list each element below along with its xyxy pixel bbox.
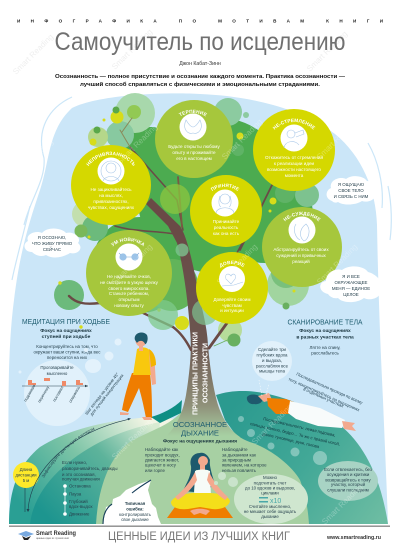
distance marker: Длина — [20, 467, 33, 472]
cloud: right bottom: Я И ВСЕ — [342, 274, 360, 279]
text on teal hill: пальцы, колено, бедро… То же с правой ногой, — [250, 421, 341, 447]
list: steps: вдох-выдох — [69, 504, 93, 509]
text: breathing left: проходит воздух, — [145, 452, 180, 458]
section: walking meditation — [22, 317, 110, 360]
cloud: right top: СВОЕ ТЕЛО — [338, 188, 364, 193]
cloud: left: Я ОСОЗНАЮ, — [38, 235, 66, 240]
text: Smart Reading — [11, 137, 55, 181]
scan caption arc: Последовательно проходя по всему — [296, 371, 364, 406]
text: Smart Reading — [315, 242, 359, 286]
cloud: right bottom: ОКРУЖАЮЩЕЕ — [334, 280, 368, 285]
inner teal band — [30, 422, 160, 524]
section: body scan: расслабьтесь — [311, 350, 340, 356]
panel: beginner mind: новому опыту — [114, 303, 145, 308]
breath circle: мышцы тела — [259, 368, 285, 374]
list: steps: Движение — [69, 512, 90, 516]
cloud: left — [25, 228, 80, 257]
text: if needed: получая движения — [62, 476, 100, 482]
step diagram: поднимаю — [23, 383, 36, 402]
panel: principle top-left: привязанностях, — [93, 199, 129, 204]
trunk caption — [192, 332, 210, 415]
watermarks — [11, 27, 349, 76]
icons: foot steps — [28, 378, 83, 386]
central light green hill — [96, 402, 309, 524]
text on teal hill: далее туловище, руки, голова — [262, 431, 320, 449]
section: breathing: ОСОЗНАННОЕ — [173, 420, 227, 429]
callout: typical mistake: свое дыхание — [121, 517, 149, 522]
text: breathing left: или горле — [145, 468, 165, 473]
left teal hill — [9, 417, 190, 524]
list: steps — [63, 484, 93, 516]
panel: principle top-left — [71, 145, 151, 225]
logo: Smart Reading — [36, 531, 76, 537]
distance marker: дистанции — [16, 472, 37, 478]
step diagram: мысленно — [47, 371, 68, 376]
watermarks: Smart Reading — [305, 29, 349, 73]
panel: beginner mind — [86, 230, 172, 316]
text: breathing left: двигается живот, — [145, 458, 179, 462]
section: walking meditation: Концентрируйтесь на том, что — [36, 344, 98, 349]
icon: hands — [185, 120, 201, 133]
panel: non-striving: Откажитесь от стремления — [265, 155, 323, 160]
diagonal caption: gaze: Шаг взгляда на уровне 45° — [84, 371, 120, 416]
section: walking meditation: Фокус на ощущениях — [40, 328, 92, 334]
panel: non-judging: суждений и привычных — [276, 252, 327, 258]
text: breathing left: щекочет в носу — [145, 462, 177, 468]
callout: typical mistake: ошибка: — [126, 506, 144, 512]
counting circle: подсчитать счет — [254, 480, 286, 486]
section: walking meditation: МЕДИТАЦИЯ ПРИ ХОДЬБЕ — [22, 317, 110, 326]
cloud: right bottom — [320, 266, 381, 302]
panel: non-striving: возможности настоящего — [267, 167, 321, 172]
section: breathing: Фокус на ощущениях дыхания — [163, 438, 237, 444]
panel: non-judging — [262, 207, 342, 287]
diagonal caption: gaze: для лучшей концентрации — [89, 373, 125, 417]
text on teal hill: Последовательность: левая подошва, — [263, 416, 336, 438]
counting circle: циклами — [261, 490, 279, 496]
distance marker — [13, 462, 39, 512]
panel: acceptance — [190, 175, 262, 247]
counting circle: Считайте мысленно, — [249, 504, 291, 509]
text: breathing left: Наблюдайте как — [145, 447, 178, 452]
footer slogan: ЦЕННЫЕ ИДЕИ ИЗ ЛУЧШИХ КНИГ — [108, 531, 291, 543]
section: walking meditation: переносится на них — [47, 355, 88, 360]
trunk caption: ПРИНЦИПЫ ПРАКТИКИ — [192, 332, 200, 415]
callout: typical mistake — [103, 480, 161, 524]
icon: woman — [216, 194, 234, 213]
text: breathing left — [145, 447, 180, 473]
text: Smart Reading — [115, 122, 159, 166]
intro text — [55, 74, 345, 88]
text: Smart Reading — [250, 402, 294, 446]
text: Smart Reading — [320, 482, 364, 526]
section: body scan: Фокус на ощущениях — [299, 328, 351, 334]
text: breathing right: за природным — [222, 458, 251, 462]
text: breathing right — [222, 447, 267, 473]
right teal hill — [216, 391, 388, 524]
cloud: left: СЕЙЧАС — [43, 247, 61, 252]
tree foliage — [54, 93, 319, 342]
small teal slope — [151, 400, 182, 423]
arrow along hill: Зафиксируйте дистанцию взглядом — [42, 428, 95, 478]
panel: patience: Будьте открыты любому — [168, 144, 220, 149]
breath circle: Сделайте три — [258, 347, 287, 352]
section: breathing: ДЫХАНИЕ — [181, 428, 219, 438]
callout: distracted: участку, который — [331, 482, 366, 487]
intro text: лучший способ справляться с физическими и эмоциональными страданиями. — [80, 81, 320, 88]
icon: faces — [294, 224, 309, 241]
panel: non-striving — [253, 109, 335, 191]
cloud: right bottom: ЦЕЛОЕ — [343, 292, 359, 297]
callout: distracted: слушали последним — [327, 488, 369, 492]
intro text: Осознанность — полное присутствие и осознание каждого момента. Практика осознанности — — [55, 74, 345, 80]
callout: typical mistake: Типичная — [125, 501, 146, 506]
panel: trust — [196, 252, 268, 324]
cloud: right top — [327, 176, 378, 204]
panel: trust: чувствам — [222, 303, 242, 308]
logo: ценные идеи из лучших книг — [36, 537, 69, 540]
text: Smart Reading — [315, 117, 359, 161]
panel: beginner mind: УМ НОВИЧКА — [110, 238, 144, 246]
scan caption arc: в отдельных участках — [303, 386, 345, 409]
list: steps: Пауза — [69, 492, 82, 496]
section: walking meditation: окружает ваши ступни, когда вес — [34, 350, 101, 354]
panel: principle top-left: на мыслях, — [99, 193, 123, 198]
panel: non-judging: НЕ-СУЖДЕНИЕ — [283, 212, 321, 222]
cloud: right top: И СВЯЗЬ С НИМ — [334, 194, 369, 199]
logo — [18, 531, 76, 540]
section: breathing — [163, 420, 237, 444]
panel: non-striving: к реализации идеи — [274, 161, 315, 166]
website: www.smartreading.ru — [326, 535, 381, 541]
bubbles: breathing — [214, 472, 238, 487]
panel: non-striving: НЕ-СТРЕМЛЕНИЕ — [272, 118, 316, 130]
text: Smart Reading — [215, 242, 259, 286]
watermarks: Smart Reading — [11, 32, 55, 76]
counting circle: Можно — [263, 475, 278, 480]
panel: beginner mind: Не надевайте очков, — [107, 273, 151, 279]
text: breathing right: Наблюдайте — [222, 447, 248, 452]
breath circle: расслабляя все — [256, 364, 289, 368]
header line: ИНФОГРАФИКА ПО МОТИВАМ КНИГИ — [17, 18, 383, 24]
text: if needed: разворачивайтесь, дважды — [62, 466, 118, 471]
bubbles: lying — [238, 416, 327, 465]
tree branches — [69, 118, 272, 350]
panel: patience: его в настоящем — [176, 156, 212, 161]
step diagram — [22, 360, 90, 426]
panel: non-striving: момента — [285, 173, 304, 178]
text: Smart Reading — [220, 117, 264, 161]
panel: acceptance: как она есть — [213, 231, 240, 236]
step diagram: поставил — [52, 385, 65, 402]
text: if needed: и это осознавая, — [62, 472, 96, 477]
counting circle — [234, 474, 308, 524]
counting circle: до 10 вдохов и выдохов, — [245, 486, 295, 490]
callout: distracted: возвращайтесь к тому — [325, 478, 371, 482]
breath circle: и выдоха, — [262, 358, 282, 363]
step diagram: опираюсь — [68, 385, 81, 404]
watermarks: Smart Reading — [110, 27, 154, 71]
callout: distracted — [318, 461, 378, 501]
counting circle: дыхание — [261, 514, 279, 519]
section: body scan: в разных участках тела — [296, 336, 354, 340]
panel: non-judging: реакций — [292, 258, 310, 264]
section: body scan — [288, 318, 363, 356]
callout: typical mistake: контролировать — [119, 512, 152, 517]
text: Smart Reading — [110, 417, 154, 461]
text: breathing right: явлением, на которое — [222, 462, 267, 468]
bottom divider — [9, 526, 390, 527]
step diagram: Проговаривайте — [40, 365, 74, 370]
panel: non-judging: Абстрагируйтесь от своих — [273, 246, 329, 252]
icon: heart in hand — [222, 274, 243, 286]
bubbles — [18, 338, 122, 374]
blue background blob — [8, 93, 388, 524]
panel: patience: опыту и проживайте — [172, 149, 216, 155]
trunk caption: ОСОЗНАННОСТИ — [202, 343, 210, 403]
icon: cycle x10: x10 — [270, 498, 281, 505]
panel: principle top-left: Не зацикливайтесь — [90, 186, 132, 192]
distance marker: 5 м — [23, 478, 29, 483]
text: if needed: Если нужно, — [62, 460, 87, 465]
panel: trust: Доверяйте своим — [213, 296, 251, 302]
icon: person with binoculars — [284, 130, 304, 148]
text: if needed — [62, 460, 118, 482]
foliage over trunk — [148, 184, 240, 346]
lying person — [247, 380, 356, 431]
panel: acceptance: ПРИНЯТИЕ — [210, 184, 240, 191]
cloud: left: ЧТО ЖИВУ ПРЯМО — [32, 241, 73, 246]
panel: beginner mind: не смотрите в узкую щелку — [100, 280, 159, 285]
panel: trust: ДОВЕРИЕ — [220, 260, 245, 268]
text: breathing right: нельзя повлиять — [222, 468, 257, 473]
panel: acceptance: Принимайте — [213, 218, 240, 224]
panel: patience — [155, 100, 233, 178]
panel: beginner mind: открытым — [118, 297, 140, 302]
walking person — [120, 333, 156, 420]
cloud: right top: Я ОЩУЩАЮ — [338, 182, 365, 187]
panel: patience: ТЕРПЕНИЕ — [178, 110, 208, 116]
icon: glasses — [119, 253, 139, 261]
icon: sitting figure — [101, 161, 121, 181]
panel: beginner mind: Станьте ребенком, — [109, 291, 149, 296]
section: body scan: СКАНИРОВАНИЕ ТЕЛА — [288, 318, 363, 326]
text: breathing right: за дыханием как — [222, 452, 256, 458]
panel: trust: и интуиции — [220, 308, 244, 313]
section: body scan: Лягте на спину, — [310, 345, 341, 350]
arrow along hill — [26, 418, 131, 512]
panel: beginner mind: своего микроскопа. — [108, 286, 150, 291]
text: Smart Reading — [110, 242, 154, 286]
section: walking meditation: ступней при ходьбе — [42, 333, 91, 340]
counting circle: не мешает себе ощущать — [244, 509, 297, 514]
title: Самоучитель по исцелению — [54, 28, 346, 56]
decorative outline strokes — [12, 97, 391, 280]
tree trunk — [146, 198, 240, 437]
list: steps: Остановка — [69, 484, 91, 488]
sitting person — [167, 453, 233, 518]
callout: distracted: осуждения и критики — [327, 472, 370, 477]
step diagram: переношу — [37, 385, 50, 404]
list: steps: Глубокий — [69, 499, 88, 504]
panel: principle top-left: чувствах, ощущениях — [88, 205, 135, 210]
panel: acceptance: реальность — [214, 225, 239, 230]
panel: principle top-left: НЕПРИВЯЗАННОСТЬ — [86, 152, 134, 166]
scan caption arc: телу, концентрируйтесь на ощущениях — [288, 376, 361, 413]
cloud: right bottom: МЕНЯ — ЕДИНОЕ — [332, 286, 370, 291]
callout: distracted: Если отвлекаетесь, без — [324, 467, 372, 472]
author: Джон Кабат-Зинн — [179, 61, 221, 67]
breath circle: глубоких вдоха — [257, 352, 288, 358]
breath circle — [252, 341, 292, 381]
